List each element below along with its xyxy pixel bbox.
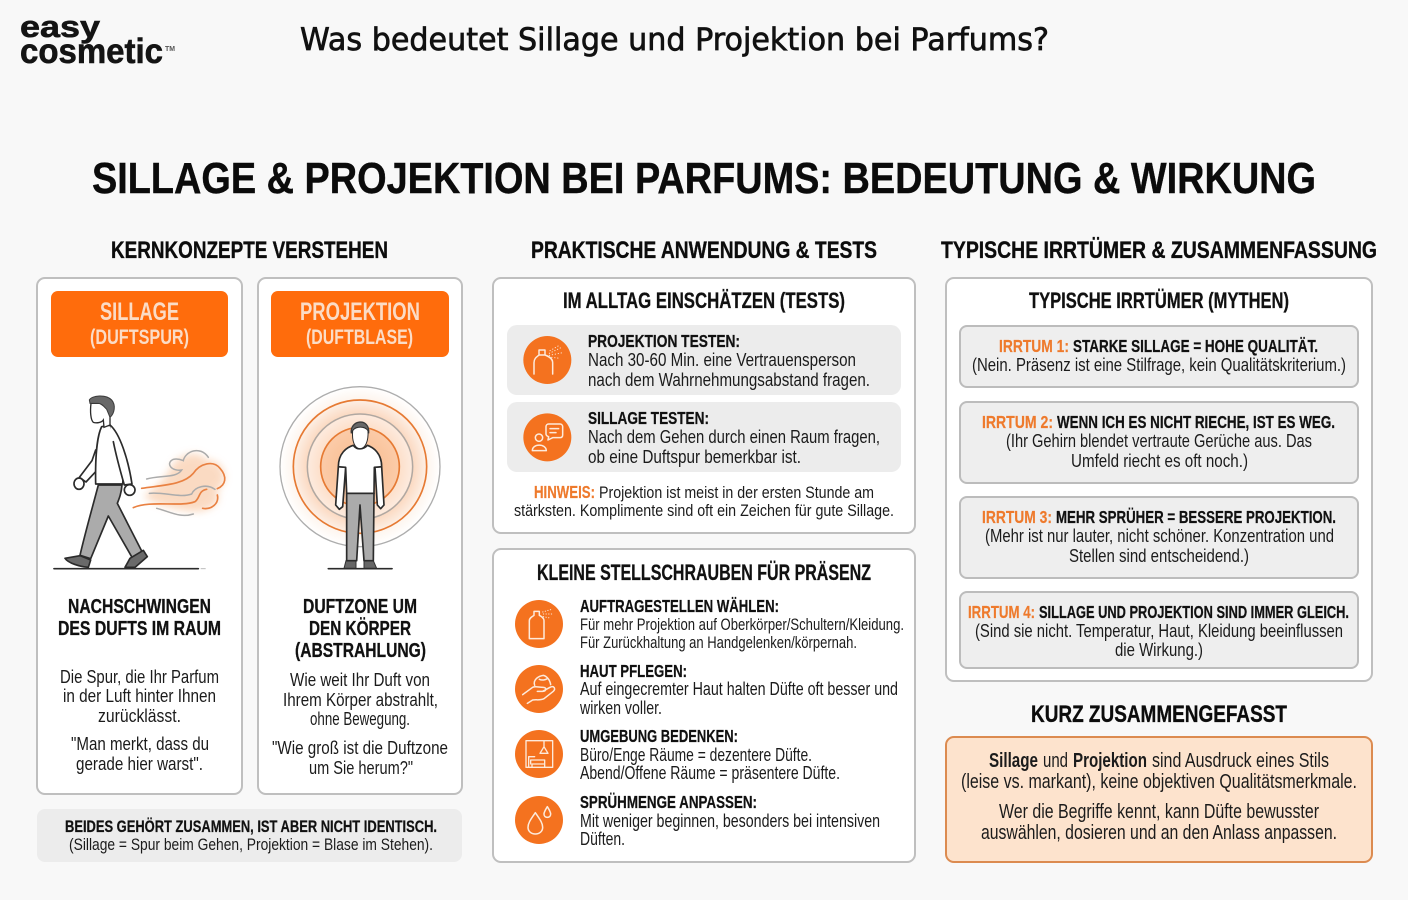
row: Projektion testen: Nach 30-60 Min. eine Vertrauensperson <box>588 350 856 370</box>
text: Projektion description: "Wie groß ist die Duftzone <box>272 738 448 758</box>
myth 2 <box>960 402 1358 483</box>
row: Sillage testen <box>507 402 901 472</box>
row: Projektion testen <box>507 325 901 395</box>
note: Hinweis: Projektion ist meist in der ersten Stunde am <box>599 483 874 502</box>
row: Sprühmenge anpassen: SPRÜHMENGE ANPASSEN: <box>580 792 757 812</box>
text: Projektion description <box>272 670 448 778</box>
panel: Kleine Stellschrauben <box>493 549 915 862</box>
badge: Projektion: (DUFTBLASE) <box>306 326 413 349</box>
myth 3: Stellen sind entscheidend.) <box>1069 546 1249 566</box>
icon: hand with cream <box>515 665 563 713</box>
badge: Sillage: (DUFTSPUR) <box>90 326 189 349</box>
row: Umgebung bedenken: Abend/Offene Räume = präsentere Düfte. <box>580 763 840 783</box>
note: Hinweis: stärksten. Komplimente sind oft ein Zeichen für gute Sillage. <box>514 501 894 520</box>
myth 1 <box>960 326 1358 387</box>
panel: Sillage <box>37 278 242 794</box>
logo: easy cosmetic: easy <box>20 9 101 44</box>
row: Umgebung bedenken: Büro/Enge Räume = dezentere Düfte. <box>580 745 812 765</box>
row: Umgebung bedenken: UMGEBUNG BEDENKEN: <box>580 726 738 746</box>
column heading: Kernkonzepte: KERNKONZEPTE VERSTEHEN <box>111 237 388 264</box>
icon: drops <box>515 796 563 844</box>
row: Haut pflegen: Auf eingecremter Haut halten Düfte oft besser und <box>580 679 898 699</box>
heading: Duftzone: DEN KÖRPER <box>309 617 411 640</box>
row: Auftragestellen: Für mehr Projektion auf Oberkörper/Schultern/Kleidung. <box>580 616 904 634</box>
icon: people talking <box>523 413 571 461</box>
text: Sillage description: zurücklässt. <box>98 706 181 726</box>
text: Projektion description: Ihrem Körper abstrahlt, <box>283 690 438 710</box>
row: Sillage testen: ob eine Duftspur bemerkbar ist. <box>588 447 801 467</box>
panel: summary: sind Ausdruck eines Stils <box>1152 750 1329 772</box>
illustration: standing person with scent rings <box>280 387 440 569</box>
heading: Nachschwingen: DES DUFTS IM RAUM <box>58 618 221 640</box>
logo: easy cosmetic: TM <box>165 46 175 53</box>
row: Sprühmenge anpassen <box>515 792 880 849</box>
panel heading: KLEINE STELLSCHRAUBEN FÜR PRÄSENZ <box>537 560 871 585</box>
badge: Projektion <box>271 291 449 357</box>
text: Projektion description: Wie weit Ihr Duft von <box>290 670 430 690</box>
panel: summary: Wer die Begriffe kennt, kann Düfte bewusster <box>999 801 1319 823</box>
callout: Beides gehört zusammen: (Sillage = Spur beim Gehen, Projektion = Blase im Stehen). <box>69 836 433 854</box>
icon: spray bottle <box>523 336 571 384</box>
logo: easy cosmetic <box>20 9 175 71</box>
row: Auftragestellen <box>515 596 904 652</box>
panel: summary: Projektion <box>1073 750 1147 772</box>
text: Sillage description: gerade hier warst". <box>76 754 203 774</box>
panel: Typische Irrtümer <box>946 278 1372 681</box>
row: Auftragestellen: AUFTRAGESTELLEN WÄHLEN: <box>580 596 779 616</box>
heading: Duftzone: (ABSTRAHLUNG) <box>295 640 426 662</box>
panel: Im Alltag einschätzen <box>493 278 915 533</box>
myth 2: IRRTUM 2: <box>982 412 1053 432</box>
myth 4 <box>960 592 1358 668</box>
panel: Projektion <box>258 278 462 794</box>
heading: Duftzone: DUFTZONE UM <box>303 596 417 618</box>
panel: summary <box>946 737 1372 862</box>
row: Umgebung bedenken <box>515 726 840 783</box>
heading: Duftzone <box>295 596 426 662</box>
text: Projektion description: um Sie herum?" <box>309 758 413 778</box>
row: Auftragestellen: Für Zurückhaltung an Handgelenken/körpernah. <box>580 634 857 652</box>
callout: Beides gehört zusammen: BEIDES GEHÖRT ZUSAMMEN, IST ABER NICHT IDENTISCH. <box>65 817 437 836</box>
row: Haut pflegen: HAUT PFLEGEN: <box>580 661 687 681</box>
panel heading: IM ALLTAG EINSCHÄTZEN (TESTS) <box>563 288 845 313</box>
myth 3: (Mehr ist nur lauter, nicht schöner. Konzentration und <box>985 526 1334 546</box>
page title: Was bedeutet Sillage und Projektion bei Parfums? <box>300 22 1049 58</box>
text: Sillage description: Die Spur, die Ihr Parfum <box>60 667 219 687</box>
icon: room <box>515 730 563 778</box>
badge: Sillage <box>51 291 228 357</box>
myth 1: STARKE SILLAGE = HOHE QUALITÄT. <box>1073 336 1318 356</box>
myth 4: die Wirkung.) <box>1115 640 1203 660</box>
row: Sprühmenge anpassen: Düften. <box>580 829 625 849</box>
row: Sillage testen: Nach dem Gehen durch einen Raum fragen, <box>588 427 880 447</box>
heading: Nachschwingen <box>58 596 221 640</box>
logo: easy cosmetic: cosmetic <box>20 32 163 71</box>
text: Sillage description: in der Luft hinter Ihnen <box>63 686 216 706</box>
heading: Nachschwingen: NACHSCHWINGEN <box>68 596 211 618</box>
icon: perfume bottle <box>515 600 563 648</box>
myth 2: Umfeld riecht es oft noch.) <box>1071 451 1248 471</box>
callout: Beides gehört zusammen <box>37 809 462 862</box>
text: Projektion description: ohne Bewegung. <box>310 709 410 729</box>
row: Projektion testen: PROJEKTION TESTEN: <box>588 331 740 351</box>
text: Sillage description: "Man merkt, dass du <box>71 734 209 754</box>
row: Sprühmenge anpassen: Mit weniger beginnen, besonders bei intensiven <box>580 811 880 831</box>
badge: Sillage: SILLAGE <box>100 298 179 326</box>
row: Haut pflegen <box>515 661 898 718</box>
note: Hinweis <box>514 482 894 520</box>
row: Projektion testen: nach dem Wahrnehmungsabstand fragen. <box>588 370 870 390</box>
heading: Kurz zusammengefasst: KURZ ZUSAMMENGEFASST <box>1031 701 1287 728</box>
badge: Projektion: PROJEKTION <box>300 298 420 326</box>
row: Sillage testen: SILLAGE TESTEN: <box>588 408 709 428</box>
panel: summary: und <box>1043 750 1068 772</box>
panel: summary: Sillage <box>989 750 1038 772</box>
text: Sillage description <box>60 667 219 774</box>
row: Haut pflegen: wirken voller. <box>579 698 662 718</box>
myth 3 <box>960 497 1358 578</box>
column heading: Praktische Anwendung: PRAKTISCHE ANWENDUNG & TESTS <box>531 237 877 264</box>
illustration: walking person with scent trail <box>54 396 225 569</box>
myth 3: IRRTUM 3: <box>982 507 1052 527</box>
myth 1: IRRTUM 1: <box>999 336 1069 356</box>
note: Hinweis: HINWEIS: <box>534 482 595 502</box>
myth 4: IRRTUM 4: <box>968 602 1035 622</box>
myth 2: (Ihr Gehirn blendet vertraute Gerüche aus. Das <box>1006 431 1312 451</box>
panel heading: TYPISCHE IRRTÜMER (MYTHEN) <box>1029 288 1289 313</box>
